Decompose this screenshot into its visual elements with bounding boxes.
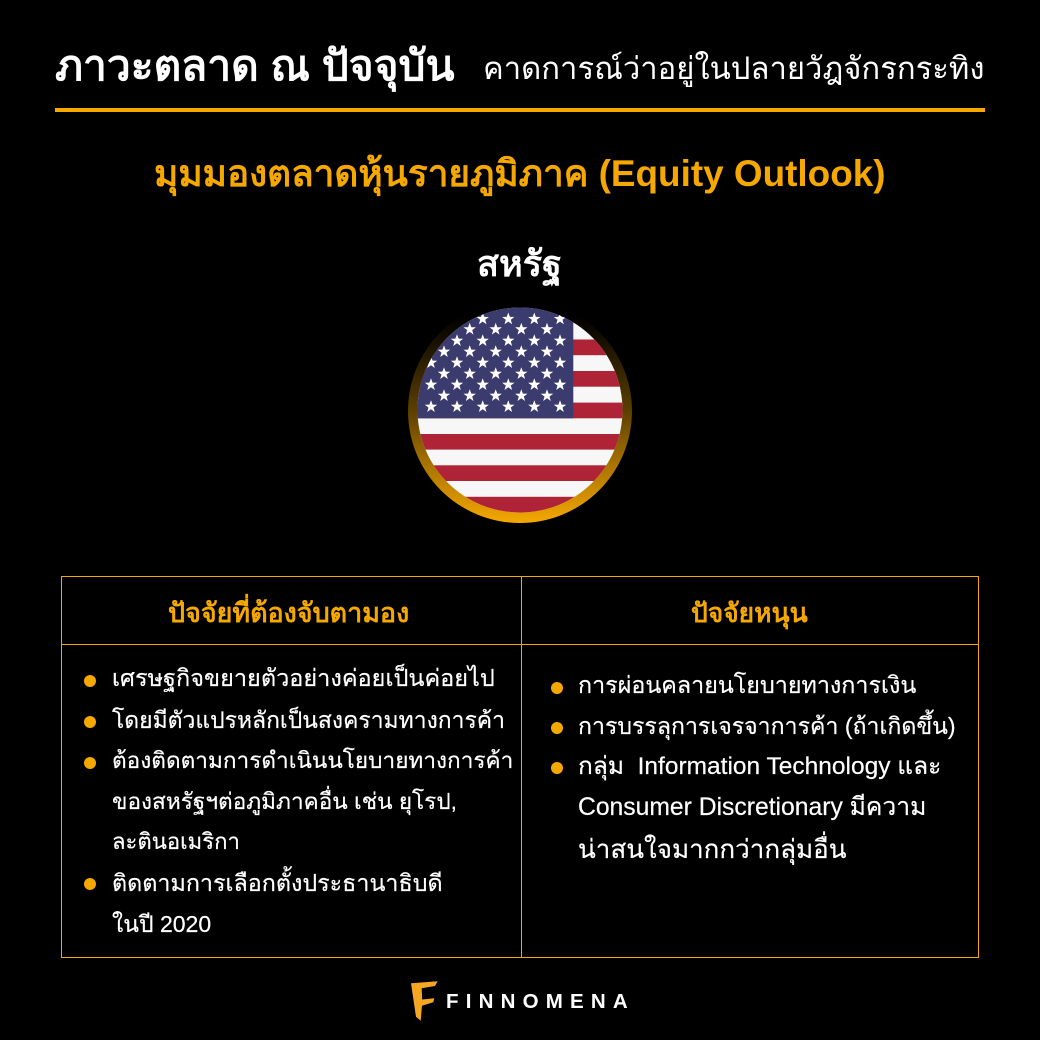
left column bullet list: [84, 664, 513, 937]
item 4 text: ในปี 2020: [112, 911, 211, 937]
bullet 3: [84, 757, 96, 769]
table column divider: [521, 577, 522, 957]
subtitle: คาดการณ์ว่าอยู่ในปลายวัฎจักรกระทิง: [483, 51, 984, 86]
right column bullet list: [551, 672, 956, 865]
section heading: มุมมองตลาดหุ้นรายภูมิภาค (Equity Outlook): [154, 153, 886, 194]
logo: [411, 981, 635, 1021]
wordmark: FINNOMENA: [446, 990, 635, 1013]
icon: F mark: [411, 981, 438, 1021]
item 3 text: ของสหรัฐฯต่อภูมิภาคอื่น เช่น ยุโรป,: [112, 789, 457, 814]
item 4 text: [112, 866, 443, 937]
item 3 text: Consumer Discretionary มีความ: [578, 794, 926, 821]
panel: factors table: [61, 576, 979, 958]
left column heading: ปัจจัยที่ต้องจับตามอง: [168, 598, 409, 628]
item 4 text: ติดตามการเลือกตั้งประธานาธิบดี: [112, 870, 443, 896]
bullet 1: [84, 675, 96, 687]
bullet 2: [84, 716, 96, 728]
bullet 3: [551, 762, 563, 774]
item 3 text: ละตินอเมริกา: [112, 829, 240, 854]
bullet 1: [551, 682, 563, 694]
title underline: [55, 108, 985, 112]
item 2 text: การบรรลุการเจรจาการค้า (ถ้าเกิดขึ้น): [578, 713, 956, 739]
bullet 4: [84, 878, 96, 890]
right column heading: ปัจจัยหนุน: [691, 598, 808, 628]
item 3 text: [112, 747, 513, 854]
table header divider: [62, 644, 978, 645]
item 3 text: น่าสนใจมากกว่ากลุ่มอื่น: [578, 834, 847, 864]
item 3 text: กลุ่ม Information Technology และ: [578, 753, 941, 780]
bullet 2: [551, 722, 563, 734]
item 3 text: [578, 753, 941, 865]
title: ภาวะตลาด ณ ปัจจุบัน: [55, 43, 455, 90]
region name: สหรัฐ: [477, 243, 562, 284]
item 1 text: เศรษฐกิจขยายตัวอย่างค่อยเป็นค่อยไป: [112, 665, 495, 691]
icon: US flag badge: [408, 308, 632, 523]
item 2 text: โดยมีตัวแปรหลักเป็นสงครามทางการค้า: [112, 707, 505, 733]
item 1 text: การผ่อนคลายนโยบายทางการเงิน: [578, 672, 916, 698]
item 3 text: ต้องติดตามการดำเนินนโยบายทางการค้า: [112, 748, 513, 773]
